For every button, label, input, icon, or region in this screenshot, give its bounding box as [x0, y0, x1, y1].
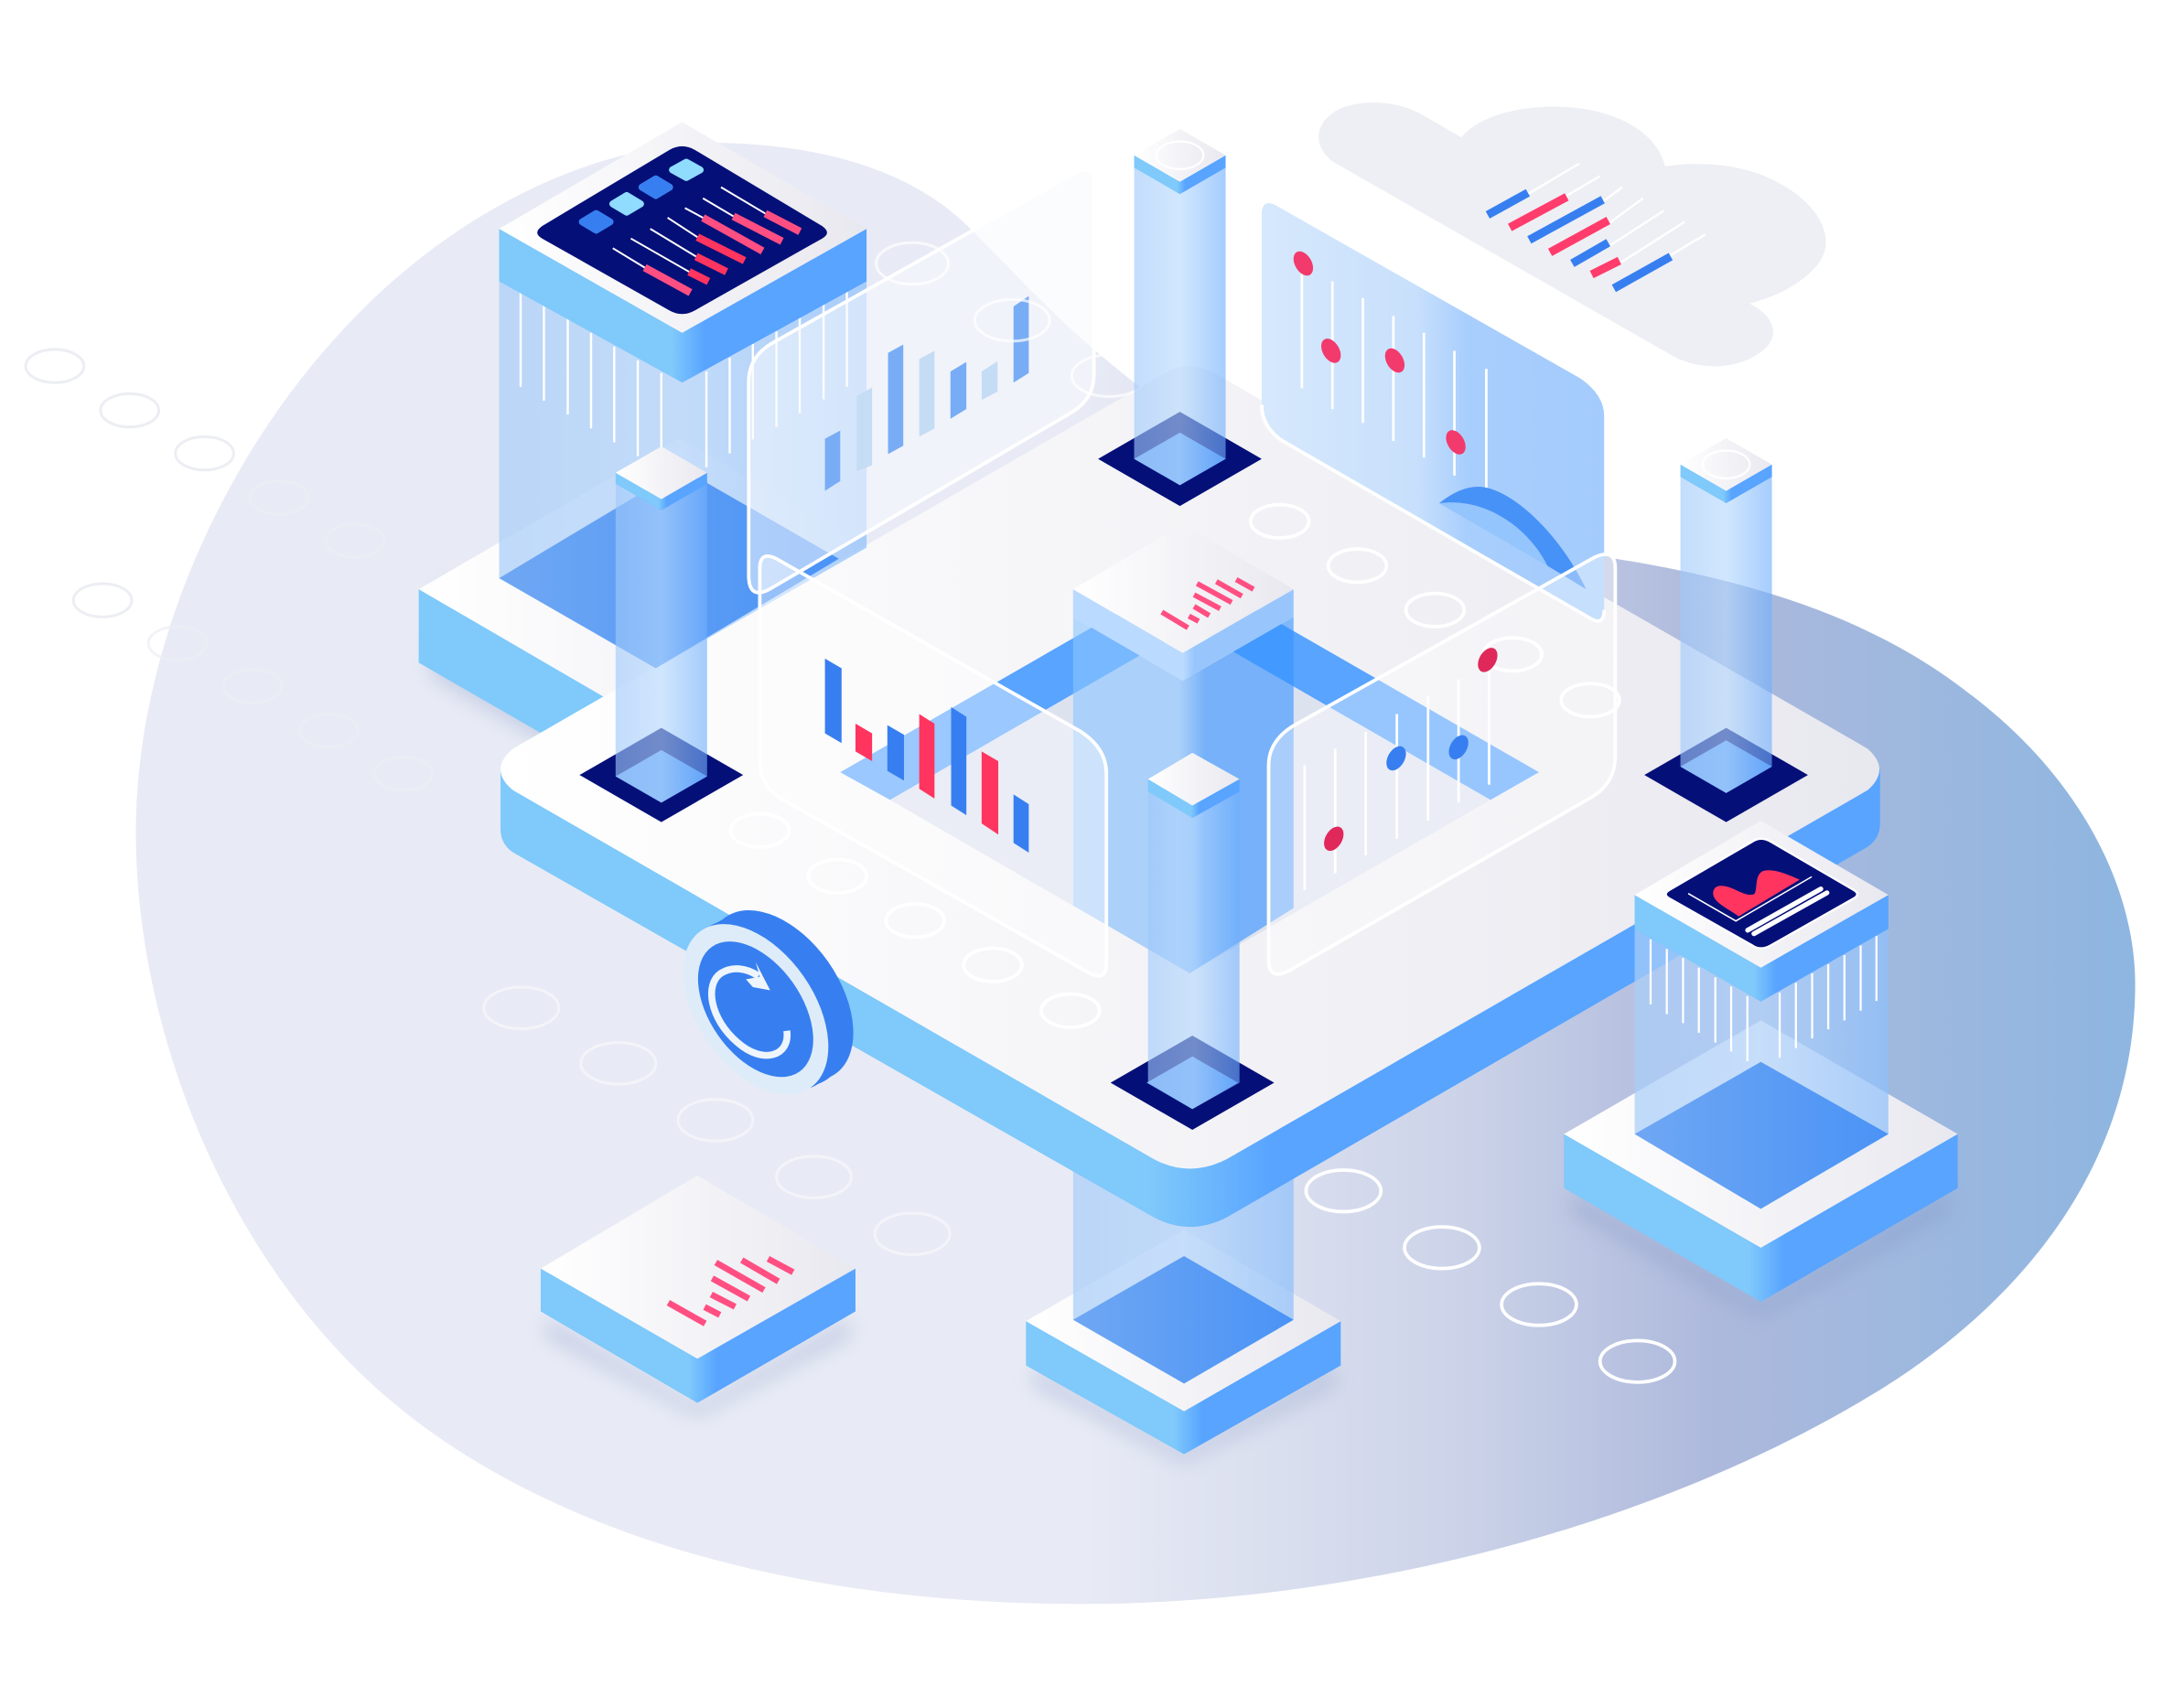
screen buttons: [582, 162, 700, 231]
right tower with chart screen: [1564, 821, 1958, 1317]
tower cap sides: [500, 229, 866, 382]
pillar 4 on front pad: [1111, 753, 1275, 1130]
background blob: [135, 143, 2136, 1604]
upper glass circles: [877, 242, 1146, 396]
right glass panel with sliders: [1269, 554, 1615, 974]
main platform: [500, 366, 1880, 1227]
right tower floor: [1635, 1062, 1889, 1208]
right tower body: [1635, 929, 1889, 1208]
right tower cap: [1635, 895, 1889, 1002]
dotted path: far left circles: [26, 349, 433, 790]
left glass panel with bar chart: [759, 556, 1106, 976]
tower floor: [500, 468, 839, 668]
screen sliders: [613, 188, 765, 272]
tower body: [500, 282, 866, 668]
navy control screen: [537, 146, 827, 314]
right tower vertical lines: [1651, 936, 1877, 1061]
right tower base: [1572, 1192, 1950, 1317]
pillar 3 on right pad: [1644, 438, 1808, 822]
lower centre pillar and base: [1026, 1172, 1340, 1463]
front left block with bars: [541, 1176, 856, 1417]
back left base platform: [419, 438, 971, 821]
cloud with bar chart: [1318, 102, 1825, 366]
tower cap top: [500, 122, 866, 333]
tower vertical lines: [521, 291, 847, 468]
left tall tower with control screen: [500, 122, 866, 668]
centre block: [1073, 524, 1294, 973]
pillar 2 on rear pad: [1098, 129, 1262, 506]
platform recess frame: [840, 571, 1539, 973]
chart area: [1713, 870, 1800, 917]
back glass panel with bars: [748, 170, 1094, 593]
rear blue panel with sliders: [1262, 203, 1604, 621]
pillar 1 on left pad: [579, 446, 743, 822]
refresh disc icon: [653, 884, 883, 1121]
dotted path: lower circles: [484, 987, 1674, 1382]
platform surface circles: [731, 505, 1620, 1027]
chart screen: [1666, 839, 1857, 949]
